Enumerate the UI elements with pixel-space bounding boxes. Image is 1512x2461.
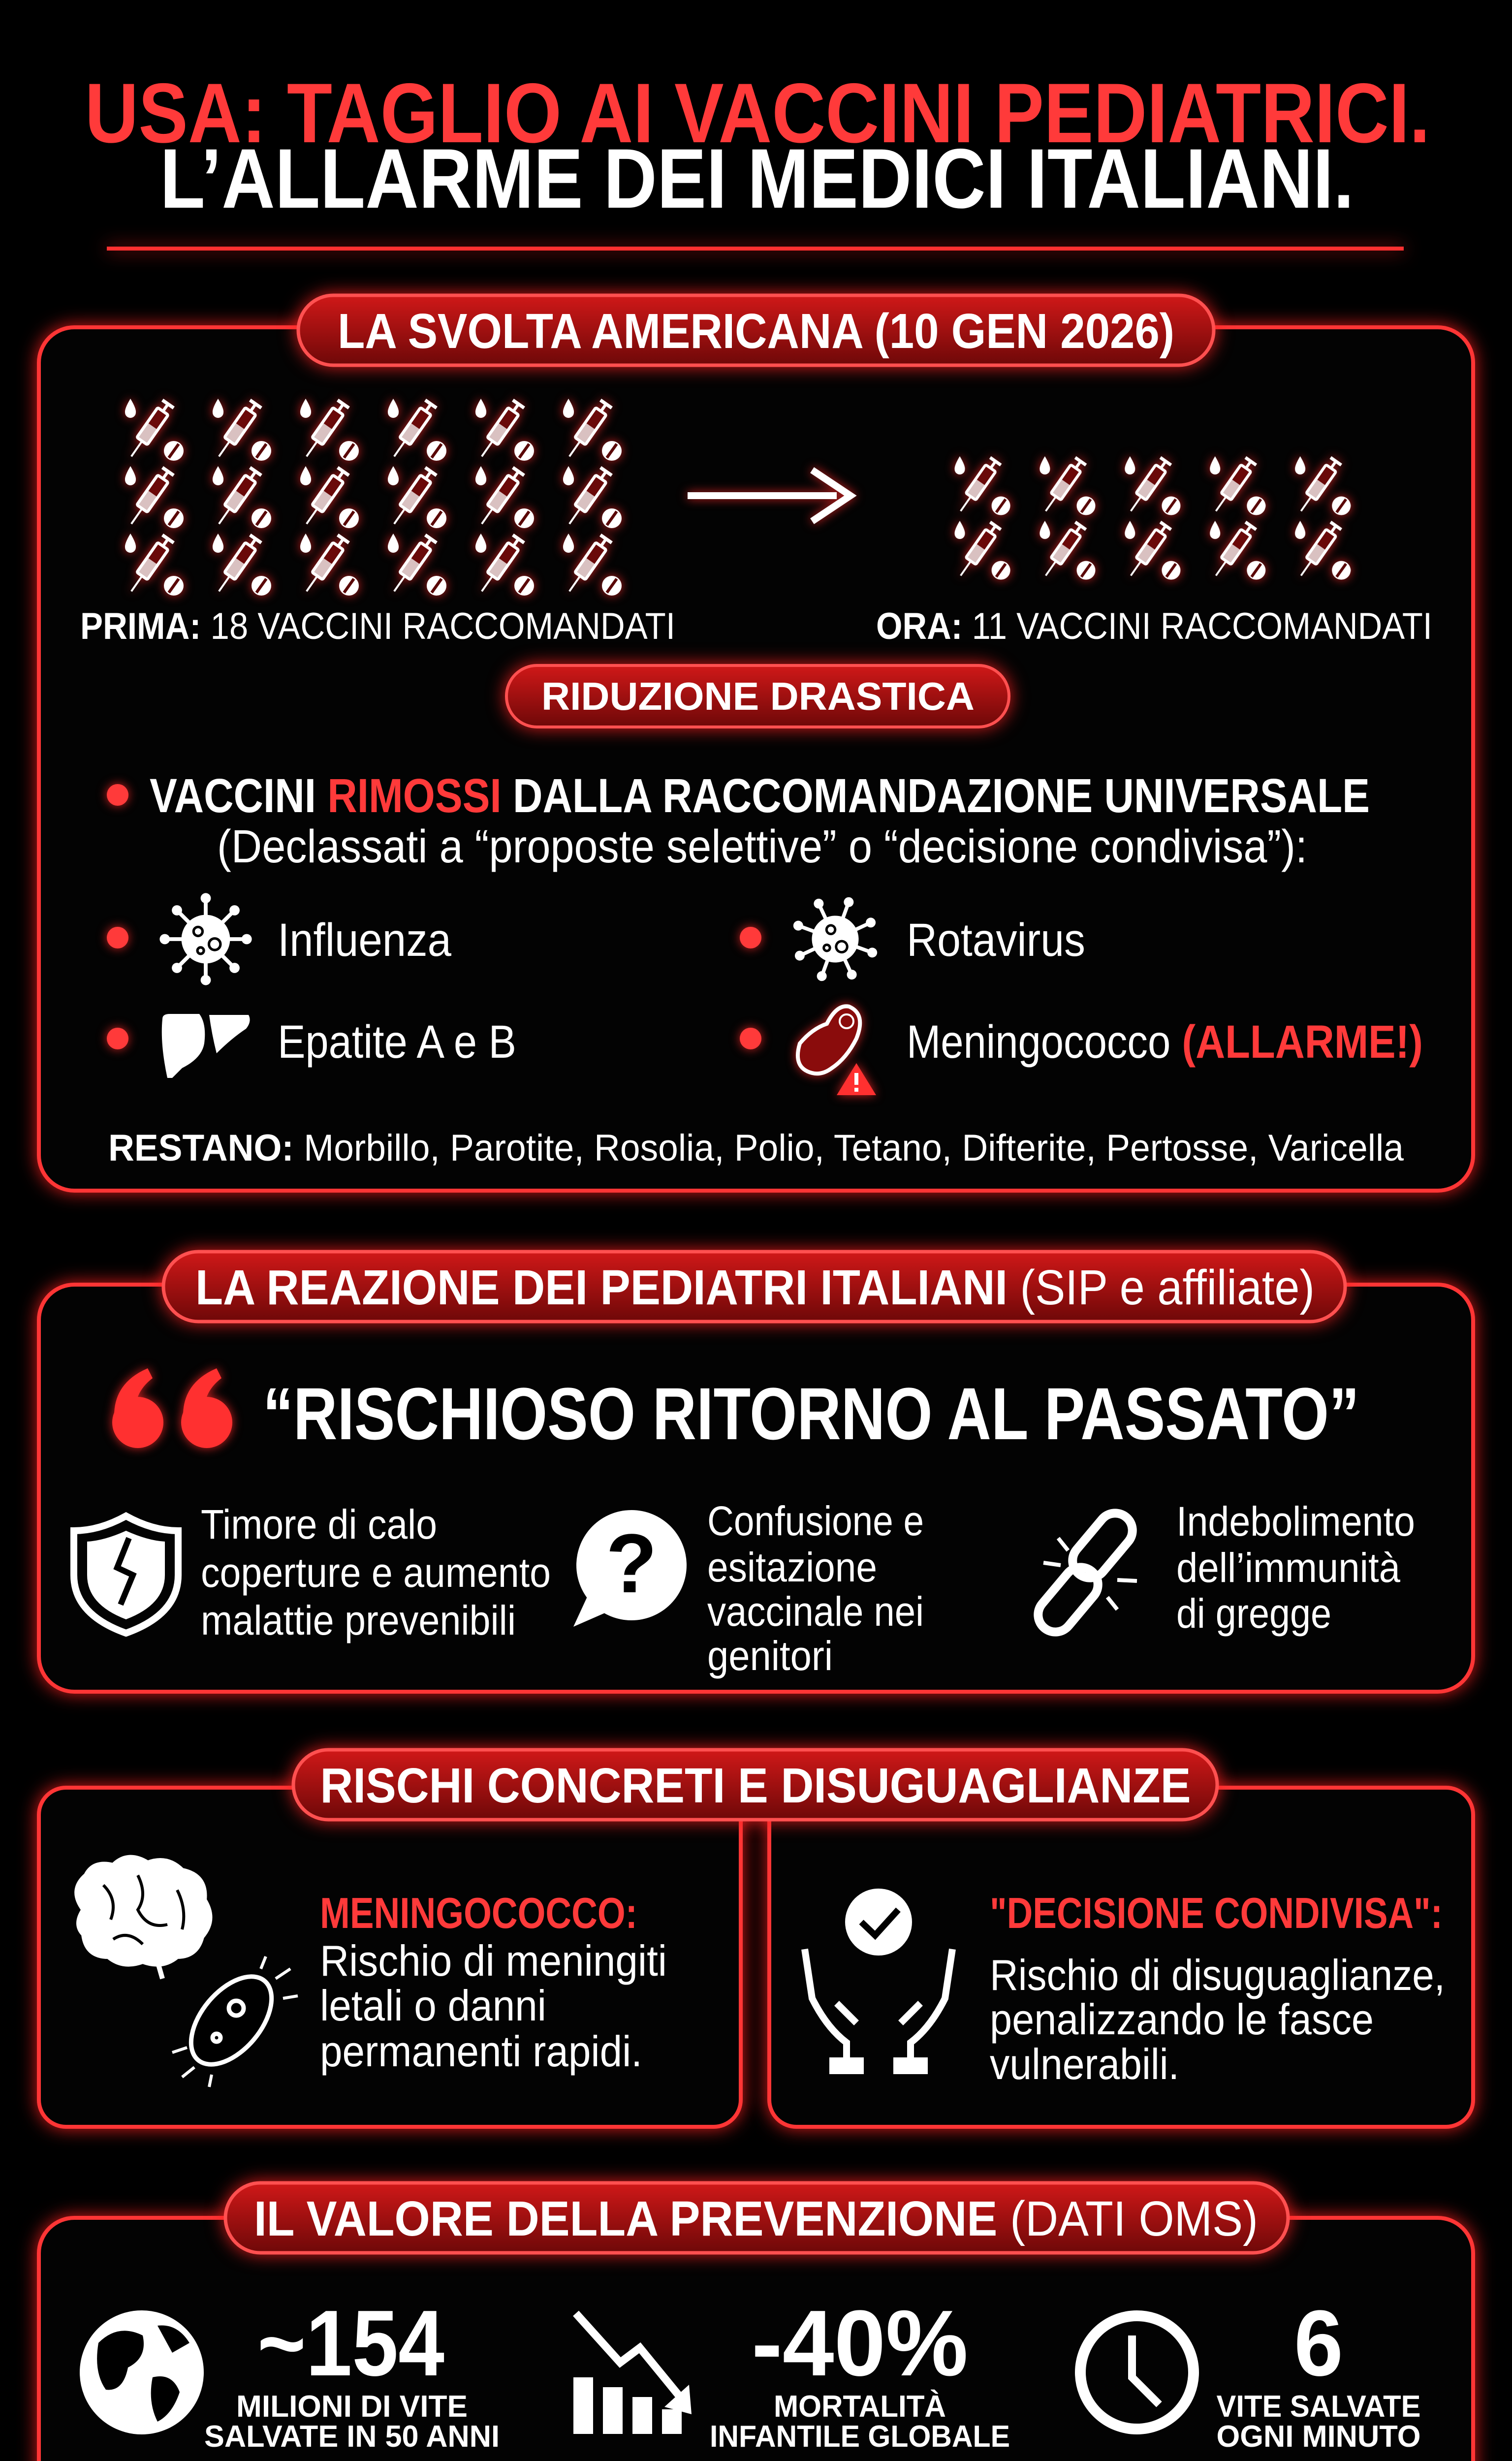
item: rotavirus bbox=[740, 883, 1085, 996]
icon grid: prima 18 vaccini bbox=[125, 399, 622, 596]
box: meningococco: MENINGOCOCCO: bbox=[320, 1889, 637, 1937]
item: epatite bbox=[107, 1014, 516, 1078]
panel: reazione pediatri bbox=[39, 1252, 1473, 1692]
title bbox=[85, 66, 1430, 226]
stat: 6 vite bbox=[1080, 2291, 1420, 2454]
item: confusione: genitori bbox=[707, 1633, 833, 1679]
box: meningococco bbox=[39, 1788, 741, 2127]
pill: riduzione drastica bbox=[506, 665, 1009, 727]
item: timore bbox=[74, 1501, 551, 1643]
stat: 6 vite: VITE SALVATE bbox=[1217, 2390, 1420, 2424]
box: meningococco: Rischio di meningiti bbox=[320, 1936, 667, 1985]
icon: hands with check bbox=[805, 1889, 952, 2074]
item: confusione: ? bbox=[606, 1517, 657, 1610]
item: confusione: esitazione bbox=[707, 1544, 877, 1590]
item: immunita: di gregge bbox=[1176, 1590, 1331, 1637]
stat: 6 vite: OGNI MINUTO bbox=[1217, 2420, 1420, 2454]
icon: brain bbox=[77, 1858, 210, 1979]
heading pill: la svolta americana: LA SVOLTA AMERICANA (10 GEN 2026) bbox=[338, 304, 1174, 359]
item: confusione: vaccinale nei bbox=[707, 1588, 924, 1635]
text: vaccini rimossi bbox=[107, 769, 1370, 873]
item: timore: malattie prevenibili bbox=[201, 1597, 516, 1643]
box: decisione condivisa bbox=[769, 1788, 1473, 2127]
stat: -40% mortalita bbox=[573, 2291, 1010, 2454]
icon: bacterium bbox=[172, 1956, 298, 2087]
stat: -40% mortalita: -40% bbox=[752, 2291, 968, 2396]
panel: rischi concreti bbox=[39, 1750, 1473, 2127]
item: immunita: Indebolimento bbox=[1176, 1498, 1415, 1545]
box: meningococco: letali o danni bbox=[320, 1981, 546, 2030]
item: immunita: dell’immunità bbox=[1176, 1545, 1400, 1591]
item: timore: coperture e aumento bbox=[201, 1549, 551, 1596]
item: influenza: Influenza bbox=[278, 914, 451, 966]
heading pill: reazione: LA REAZIONE DEI PEDIATRI ITALIANI (SIP e affiliate) bbox=[195, 1260, 1315, 1315]
stat: 6 vite: 6 bbox=[1294, 2291, 1343, 2396]
item: meningococco bbox=[740, 1006, 1423, 1095]
panel: la svolta americana bbox=[39, 295, 1473, 1191]
stat: 154 milioni: MILIONI DI VITE bbox=[236, 2390, 468, 2424]
item: timore: Timore di calo bbox=[201, 1501, 437, 1547]
item: confusione bbox=[573, 1498, 924, 1679]
stat: 154 milioni: SALVATE IN 50 ANNI bbox=[204, 2420, 500, 2454]
stat: 154 milioni: ~154 bbox=[257, 2291, 444, 2396]
text: vaccini rimossi: (Declassati a “proposte selettive” o “decisione condivisa”): bbox=[217, 820, 1307, 873]
box: meningococco: permanenti rapidi. bbox=[320, 2027, 642, 2076]
box: decisione condivisa: Rischio di disuguaglianze, bbox=[990, 1951, 1445, 1999]
panel: valore prevenzione bbox=[39, 2183, 1473, 2461]
title: L’ALLARME DEI MEDICI ITALIANI. bbox=[160, 131, 1354, 226]
box: decisione condivisa: vulnerabili. bbox=[990, 2040, 1179, 2088]
label: ora: ORA: 11 VACCINI RACCOMANDATI bbox=[876, 605, 1432, 647]
box: decisione condivisa: penalizzando le fasce bbox=[990, 1995, 1374, 2044]
stat: -40% mortalita: INFANTILE GLOBALE bbox=[710, 2420, 1010, 2454]
icon: quote marks bbox=[112, 1368, 232, 1448]
item: immunita bbox=[1031, 1498, 1415, 1639]
item: confusione: Confusione e bbox=[707, 1498, 924, 1544]
stat: -40% mortalita: MORTALITÀ bbox=[774, 2390, 946, 2424]
item: epatite: Epatite A e B bbox=[278, 1016, 516, 1068]
heading pill: valore: IL VALORE DELLA PREVENZIONE (DATI OMS) bbox=[254, 2191, 1258, 2246]
pill: riduzione drastica: RIDUZIONE DRASTICA bbox=[541, 674, 975, 718]
icon grid: ora 11 vaccini bbox=[954, 456, 1351, 580]
label: prima: PRIMA: 18 VACCINI RACCOMANDATI bbox=[80, 605, 675, 647]
heading pill: rischi: RISCHI CONCRETI E DISUGUAGLIANZE bbox=[320, 1758, 1191, 1813]
text: vaccini rimossi: VACCINI RIMOSSI DALLA RACCOMANDAZIONE UNIVERSALE bbox=[150, 769, 1370, 822]
stat: 154 milioni bbox=[83, 2291, 500, 2454]
item: influenza bbox=[107, 893, 451, 985]
text: restano: RESTANO: Morbillo, Parotite, Rosolia, Polio, Tetano, Difterite, Pertosse, Varicella bbox=[108, 1127, 1404, 1169]
arrow bbox=[688, 470, 850, 521]
item: meningococco: Meningococco (ALLARME!) bbox=[907, 1016, 1423, 1068]
item: rotavirus: Rotavirus bbox=[907, 914, 1085, 966]
